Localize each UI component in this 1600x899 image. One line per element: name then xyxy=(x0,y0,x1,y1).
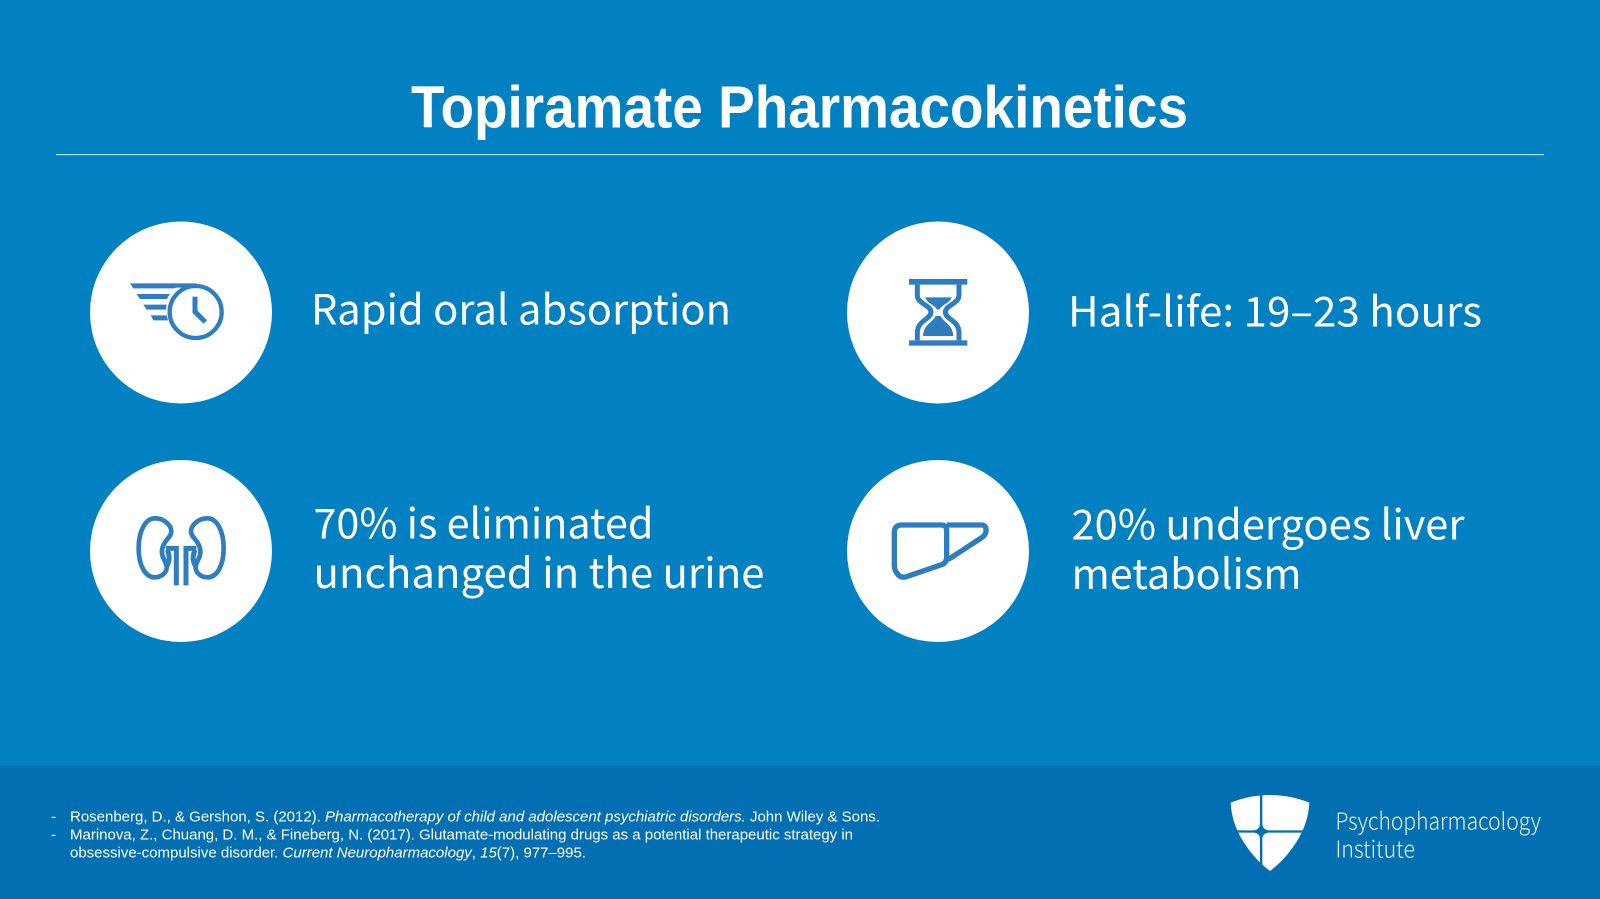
label: liver metabolism: metabolism xyxy=(1072,541,1302,601)
references xyxy=(51,808,880,862)
references: Rosenberg, D., & Gershon, S. (2012). Pharmacotherapy of child and adolescent psychiatric disorders. John Wiley & Sons. xyxy=(70,808,880,826)
item: rapid oral absorption xyxy=(90,222,731,404)
icon: shield xyxy=(1231,793,1309,871)
item: urine elimination xyxy=(90,460,764,642)
icon: kidneys xyxy=(90,460,272,642)
footer band xyxy=(0,766,1600,899)
references: - xyxy=(51,808,56,826)
logo: Psychopharmacology Institute: Institute xyxy=(1336,830,1415,864)
references: obsessive-compulsive disorder. Current Neuropharmacology, 15(7), 977–995. xyxy=(70,844,586,862)
label: half-life: Half-life: 19–23 hours xyxy=(1068,279,1482,339)
logo text: Psychopharmacology xyxy=(1336,802,1541,836)
references: - xyxy=(51,826,56,844)
item: half-life xyxy=(847,222,1482,404)
label: rapid oral absorption: Rapid oral absorption xyxy=(311,276,731,336)
references: Marinova, Z., Chuang, D. M., & Fineberg, N. (2017). Glutamate-modulating drugs as a potential therapeutic strategy in xyxy=(70,826,853,844)
icon: clock with speed lines xyxy=(90,222,272,404)
item: liver metabolism xyxy=(847,460,1465,642)
icon: liver xyxy=(847,460,1029,642)
label: liver metabolism: 20% undergoes liver xyxy=(1072,491,1465,551)
title: Topiramate Pharmacokinetics xyxy=(411,74,1188,140)
icon: hourglass xyxy=(847,222,1029,404)
label: urine elimination: 70% is eliminated xyxy=(314,490,654,550)
logo: Psychopharmacology Institute xyxy=(1231,793,1541,871)
label: urine elimination: unchanged in the urine xyxy=(314,540,764,600)
